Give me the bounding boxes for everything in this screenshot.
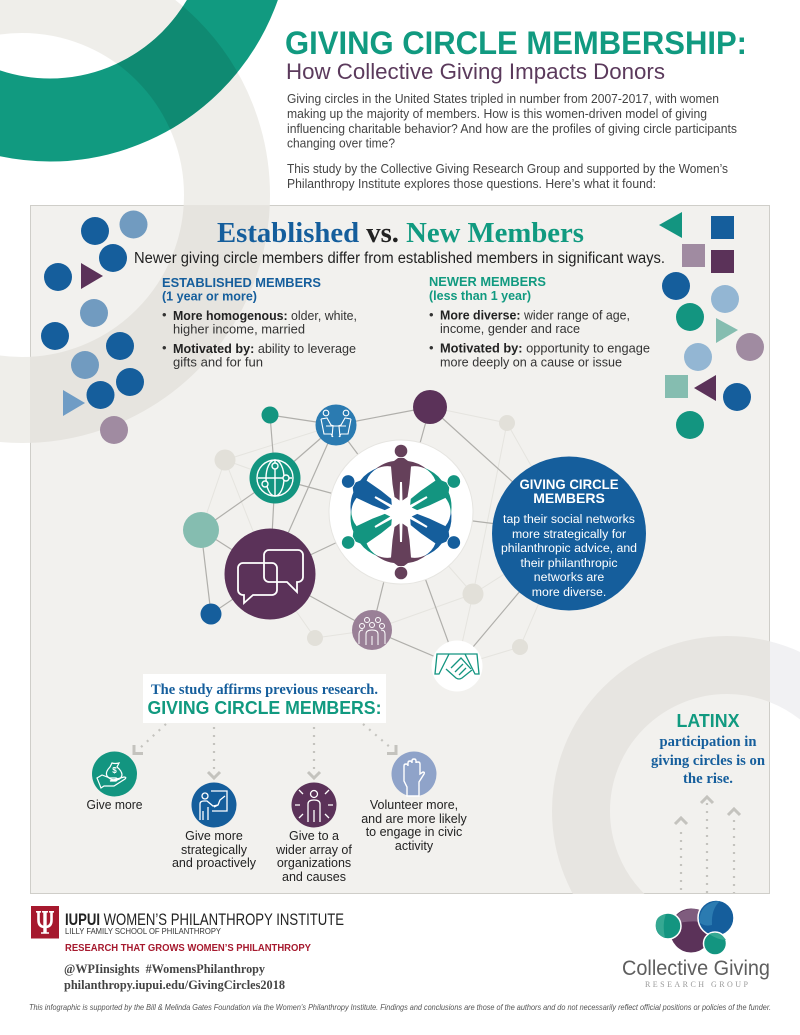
Collective Giving logo: RESEARCH GROUP (645, 980, 749, 989)
item: volunteer more (361, 752, 468, 853)
title: GIVING CIRCLE MEMBERSHIP: (285, 25, 747, 61)
item: volunteer more: and are more likely (361, 812, 468, 826)
dotted arrows up (675, 797, 740, 893)
study heading box: GIVING CIRCLE MEMBERS: (148, 698, 382, 718)
callout: social networks: tap their social networks (503, 512, 635, 526)
callout: social networks: philanthropic advice, and (501, 541, 637, 555)
background ring: gray top left (0, 0, 227, 400)
column: newer members: More diverse: wider range of age, (440, 308, 630, 322)
dotted arrows down (134, 724, 396, 778)
column: newer members: Motivated by: opportunity to engage (440, 340, 650, 356)
background ring: teal top (0, 0, 278, 162)
item: wider array: and causes (282, 870, 346, 884)
icon: meeting at table (316, 404, 356, 446)
title (285, 25, 747, 84)
IUPUI logo: LILLY FAMILY SCHOOL OF PHILANTHROPY (65, 926, 221, 936)
icon: globe (250, 452, 300, 504)
intro text: influencing charitable behavior? And how are the profiles of giving circle participants (287, 121, 737, 136)
intro text: making up the majority of members. How is this women-driven model of giving (287, 106, 707, 121)
item: wider array (275, 782, 352, 884)
item: give more: Give more (86, 798, 143, 812)
callout: social networks (492, 456, 646, 610)
decorative shapes left (41, 210, 148, 444)
panel heading: Established vs. New Members (217, 218, 584, 249)
column: newer members (429, 274, 650, 370)
column: newer members: more deeply on a cause or issue (440, 354, 622, 370)
callout: latinx: LATINX (676, 711, 740, 731)
item: give strategically: strategically (181, 843, 248, 857)
column: newer members: (less than 1 year) (429, 288, 531, 303)
callout: social networks: more diverse. (532, 585, 606, 599)
callout: latinx: participation in (660, 734, 756, 750)
item: give strategically (172, 782, 257, 870)
callout: social networks: networks are (534, 570, 604, 584)
panel heading: Newer giving circle members differ from established members in significant ways. (134, 250, 665, 267)
item: give strategically: and proactively (172, 856, 257, 870)
item: wider array: wider array of (275, 843, 352, 857)
item: volunteer more: activity (395, 839, 434, 853)
column: established members: higher income, married (173, 322, 305, 336)
network diagram (183, 390, 646, 692)
column: established members: • (162, 307, 167, 322)
small network nodes (183, 390, 528, 655)
central figures emblem (329, 440, 473, 584)
intro text: changing over time? (287, 136, 395, 150)
social and url (64, 961, 285, 992)
IUPUI logo (31, 906, 344, 938)
callout: social networks: more strategically for (512, 527, 626, 541)
tagline: RESEARCH THAT GROWS WOMEN’S PHILANTHROPY (65, 942, 311, 954)
column: established members: (1 year or more) (162, 288, 257, 304)
Collective Giving logo (622, 900, 770, 989)
callout: social networks: their philanthropic (520, 556, 618, 570)
column: established members: • (162, 340, 167, 355)
social and url: @WPIinsights #WomensPhilanthropy (64, 961, 265, 976)
callout: latinx (651, 711, 765, 787)
main panel (30, 205, 770, 894)
column: established members: Motivated by: ability to leverage (173, 341, 356, 356)
callout: social networks: GIVING CIRCLE (520, 476, 618, 492)
study heading box: The study affirms previous research. (151, 682, 378, 698)
column: established members: ESTABLISHED MEMBERS (162, 275, 321, 290)
IUPUI logo: IUPUI WOMEN’S PHILANTHROPY INSTITUTE (65, 910, 344, 929)
column: newer members: • (429, 307, 434, 322)
intro text (287, 91, 737, 191)
item: give more: $ (112, 766, 117, 775)
item: give strategically: Give more (185, 829, 243, 843)
item: give more (86, 752, 143, 812)
column: newer members: income, gender and race (440, 321, 580, 336)
study heading box (143, 674, 386, 723)
callout: social networks: MEMBERS (533, 490, 605, 506)
title: How Collective Giving Impacts Donors (286, 59, 665, 84)
social and url: philanthropy.iupui.edu/GivingCircles2018 (64, 977, 285, 992)
icon: speech bubbles (224, 528, 316, 620)
item: wider array: organizations (277, 856, 351, 870)
background ring: pale bottom right (770, 642, 800, 720)
icon: group of people (352, 610, 392, 650)
item: volunteer more: Volunteer more, (370, 798, 458, 812)
decorative shapes right (659, 212, 764, 439)
item: wider array: Give to a (289, 829, 339, 843)
intro text: Philanthropy Institute explores those questions. Here’s what it found: (287, 176, 656, 191)
icon: handshake (432, 640, 482, 692)
intro text: This study by the Collective Giving Research Group and supported by the Women’s (287, 161, 728, 176)
column: newer members: NEWER MEMBERS (429, 274, 546, 289)
column: newer members: • (429, 340, 434, 355)
callout: latinx: the rise. (683, 771, 733, 787)
intro text: Giving circles in the United States tripled in number from 2007-2017, with women (287, 91, 719, 106)
network lines (201, 407, 569, 666)
callout: latinx: giving circles is on (651, 753, 765, 769)
item: volunteer more: to engage in civic (366, 825, 462, 839)
column: established members: More homogenous: older, white, (173, 308, 357, 323)
column: established members (162, 275, 357, 370)
column: established members: gifts and for fun (173, 354, 263, 370)
Collective Giving logo: Collective Giving (622, 957, 770, 980)
panel heading (134, 218, 665, 267)
